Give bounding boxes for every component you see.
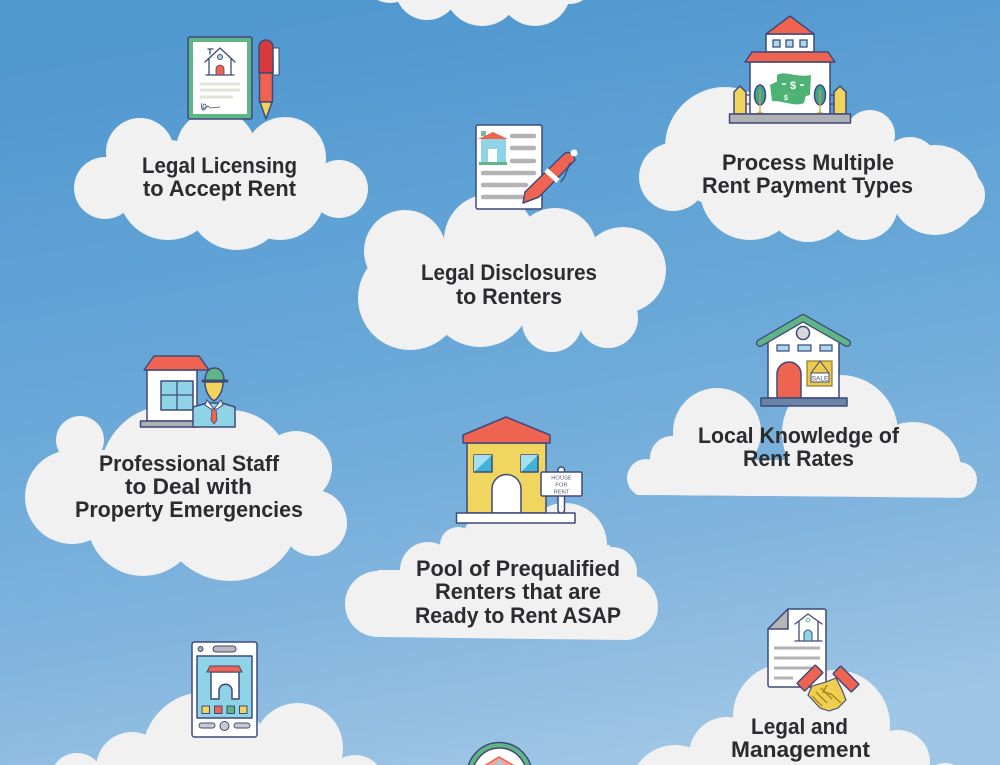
panel: pool of prequalified renters [345,417,658,640]
icon: house for sale: SALE [812,376,829,382]
label: Legal Disclosures [421,260,597,285]
label: to Deal with [125,474,252,499]
panel: professional staff [25,356,347,581]
label: Rent Rates [743,446,854,471]
icon: certificate and pen [188,37,279,119]
label [75,451,303,522]
label: to Accept Rent [143,176,296,201]
icon: contract and handshake [768,609,859,711]
cloud shape [345,500,658,640]
panel: legal licensing [74,37,368,250]
icon: house for rent [456,417,582,523]
label: Ready to Rent ASAP [415,603,621,628]
label [731,714,871,762]
icon: phone [192,642,257,737]
cloud shape [25,405,347,581]
icon: house with money [730,16,850,123]
label: Legal and [751,714,848,739]
icon: house for rent: HOUSE [551,476,572,482]
label: Professional Staff [99,451,279,476]
icon: house for rent: FOR [555,482,568,488]
panel: local knowledge [627,318,977,518]
panel: process multiple rent payment types [639,16,985,242]
label [142,153,297,201]
cloud shape [630,664,967,765]
cloud shape [74,110,368,250]
label: Pool of Prequalified [416,556,620,581]
label [415,556,621,628]
label: to Renters [456,284,562,309]
icon: house for rent: RENT [554,490,570,496]
cloud: top cropped [362,0,594,26]
panel: legal disclosures [358,125,666,352]
label [698,423,899,471]
icon: house for sale [760,318,847,406]
label: Renters that are [435,579,601,604]
cloud shape [627,375,977,498]
label: Process Multiple [722,150,894,175]
label: Property Emergencies [75,497,303,522]
panel: legal and management [630,609,967,765]
cloud shape [639,87,985,242]
icon: house and staff [140,356,235,427]
cloud shape [50,692,385,765]
icon: document and pen [476,125,578,209]
icon: house with money: $ [784,95,788,102]
label: Rent Payment Types [702,173,913,198]
label [702,150,913,198]
icon: house with money: $ [790,80,796,92]
label: Local Knowledge of [698,423,899,448]
label: Management [731,737,871,762]
badge: circular house logo [467,742,532,765]
label [421,260,597,309]
cloud shape [358,194,666,352]
panel: online phone, cropped at bottom [50,642,385,765]
label: Legal Licensing [142,153,297,178]
